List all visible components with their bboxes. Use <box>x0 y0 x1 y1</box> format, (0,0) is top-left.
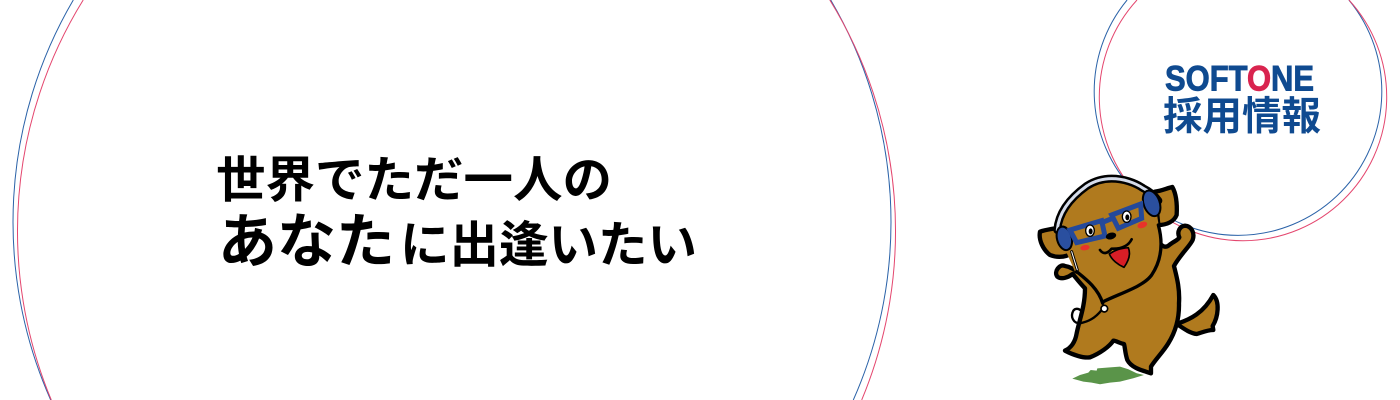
headline <box>216 153 697 275</box>
logo: SOFTONE recruitment <box>1163 58 1321 139</box>
cheeks <box>1080 220 1148 251</box>
headline: あなた <box>218 209 395 275</box>
large circle outlines <box>13 0 896 400</box>
nose <box>1105 231 1117 241</box>
small circle outlines <box>1094 0 1387 241</box>
head <box>1062 181 1160 302</box>
headphone cord upper <box>1072 252 1077 270</box>
grass shadow <box>1072 367 1144 384</box>
glasses <box>1070 204 1142 243</box>
headphone cups <box>1054 188 1164 252</box>
earphone ball <box>1101 305 1108 312</box>
tongue <box>1109 248 1129 267</box>
smile <box>1100 239 1132 253</box>
headline: 世界でただ一人の <box>216 153 612 208</box>
right ear <box>1155 187 1177 225</box>
tail <box>1178 295 1218 334</box>
mascot: dog with headphones <box>1040 179 1218 384</box>
logo subtitle: 採用情報 <box>1163 95 1321 139</box>
headphone band <box>1057 179 1158 230</box>
cord loop <box>1072 309 1102 323</box>
chin and arm lines <box>1077 225 1161 303</box>
logo wordmark: SOFTONE <box>1165 58 1314 98</box>
left ear <box>1040 228 1075 257</box>
body <box>1056 226 1193 373</box>
headline: に出逢いたい <box>400 218 697 273</box>
eyes <box>1086 211 1131 236</box>
